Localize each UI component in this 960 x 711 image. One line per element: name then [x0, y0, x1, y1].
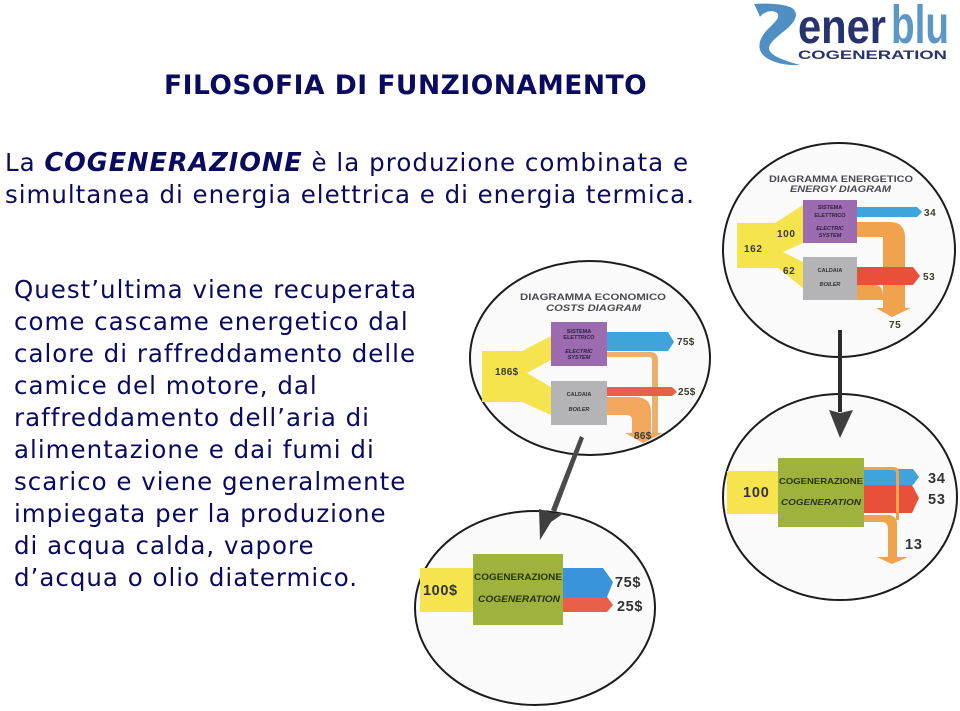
- costs blue output: [607, 332, 674, 351]
- body text: come cascame energetico dal: [14, 307, 409, 336]
- cogeneration costs values: 75$: [615, 575, 641, 591]
- costs yellow inflow: [482, 336, 551, 415]
- energy yellow inflow: [737, 205, 803, 288]
- body text: di acqua calda, vapore: [14, 531, 315, 560]
- cogeneration costs values: 100$: [423, 583, 458, 599]
- panel: costs diagram: [470, 261, 710, 455]
- costs values: [495, 337, 696, 442]
- costs orange large flow: [607, 397, 663, 443]
- body text: raffreddamento dell’aria di: [14, 403, 370, 432]
- boiler box: BOILER: [820, 282, 840, 288]
- intro text: La COGENERAZIONE è la produzione combinata e: [5, 148, 689, 178]
- cogeneration energy green box: COGENERATION: [781, 497, 862, 507]
- energy values: 75: [889, 320, 901, 331]
- costs values: 25$: [678, 387, 696, 398]
- body text: calore di raffreddamento delle: [14, 339, 416, 368]
- cogeneration energy green box: [778, 458, 864, 527]
- boiler box: [803, 257, 857, 300]
- costs values: 75$: [677, 337, 695, 348]
- cogeneration costs values: [423, 575, 643, 615]
- logo wordmark ener: ener: [798, 1, 886, 54]
- energy values: 62: [783, 266, 795, 277]
- cogeneration costs values: 25$: [617, 599, 643, 615]
- energy values: 162: [744, 244, 762, 255]
- costs boiler box: [551, 381, 607, 425]
- costs boiler box: BOILER: [569, 407, 589, 413]
- costs electric system box: SISTEMA: [567, 329, 591, 335]
- costs electric system box: SYSTEM: [568, 355, 591, 361]
- cogeneration energy orange flow: [864, 467, 899, 520]
- cogeneration costs green box: [473, 554, 563, 625]
- body text: [14, 275, 417, 592]
- energy heading: DIAGRAMMA ENERGETICO: [769, 174, 913, 185]
- intro text: simultanea di energia elettrica e di energia termica.: [5, 180, 695, 209]
- energy blue output: [857, 207, 922, 217]
- cogeneration energy values: 34: [928, 471, 946, 487]
- panel: energy diagram: ENERGY DIAGRAM: [790, 184, 892, 195]
- costs electric system box: ELETTRICO: [563, 335, 595, 341]
- electric system box: SISTEMA: [818, 205, 842, 211]
- cogeneration energy green box: COGENERAZIONE: [779, 476, 863, 486]
- panel: energy diagram: [723, 143, 955, 357]
- cogeneration costs red output: [563, 597, 613, 612]
- electric system box: SYSTEM: [819, 233, 842, 239]
- costs values: 86$: [634, 431, 652, 442]
- costs red output: [607, 387, 677, 396]
- panel: cogeneration costs: [415, 511, 655, 705]
- intro text: [5, 148, 695, 209]
- costs values: 186$: [495, 367, 519, 378]
- panel: costs diagram: COSTS DIAGRAM: [546, 303, 642, 314]
- panel: cogeneration energy: [723, 394, 957, 600]
- electric system box: ELETTRICO: [814, 213, 846, 219]
- body text: alimentazione e dai fumi di: [14, 435, 375, 464]
- logo swoosh: [754, 4, 800, 65]
- cogeneration costs yellow inflow: [420, 568, 473, 612]
- logo tagline: COGENERATION: [798, 50, 947, 62]
- body text: impiegata per la produzione: [14, 499, 387, 528]
- logo: enerblu: [754, 0, 949, 65]
- electric system box: [803, 200, 857, 243]
- cogeneration energy blue output: [864, 469, 919, 485]
- arrow: costs to cogeneration: [539, 436, 584, 540]
- cogeneration costs green box: COGENERAZIONE: [474, 572, 562, 582]
- body text: Quest’ultima viene recuperata: [14, 275, 417, 304]
- costs heading: DIAGRAMMA ECONOMICO: [520, 292, 666, 303]
- boiler box: CALDAIA: [818, 268, 842, 274]
- title: FILOSOFIA DI FUNZIONAMENTO: [164, 70, 647, 101]
- energy orange flow: [857, 222, 911, 317]
- energy values: 100: [777, 229, 796, 240]
- cogeneration costs blue output: [563, 568, 613, 597]
- body text: camice del motore, dal: [14, 371, 318, 400]
- energy values: [744, 208, 936, 331]
- energy values: 34: [924, 208, 936, 219]
- cogeneration energy yellow inflow: [727, 471, 778, 514]
- cogeneration energy values: 53: [928, 492, 946, 508]
- cogeneration energy red output: [864, 485, 919, 513]
- costs electric system box: [551, 322, 607, 366]
- costs boiler box: CALDAIA: [567, 392, 591, 398]
- electric system box: ELECTRIC: [816, 226, 845, 232]
- energy red output: [857, 267, 920, 285]
- cogeneration energy values: 100: [743, 485, 770, 501]
- energy values: 53: [923, 272, 935, 283]
- body text: d’acqua o olio diatermico.: [14, 563, 358, 592]
- costs orange thin flow: [607, 352, 658, 433]
- cogeneration energy values: [743, 471, 946, 553]
- cogeneration costs green box: COGENERATION: [478, 594, 561, 604]
- costs electric system box: ELECTRIC: [565, 349, 594, 355]
- cogeneration energy values: 13: [905, 537, 923, 553]
- arrow: energy to cogeneration: [829, 330, 853, 438]
- body text: scarico e viene generalmente: [14, 467, 406, 496]
